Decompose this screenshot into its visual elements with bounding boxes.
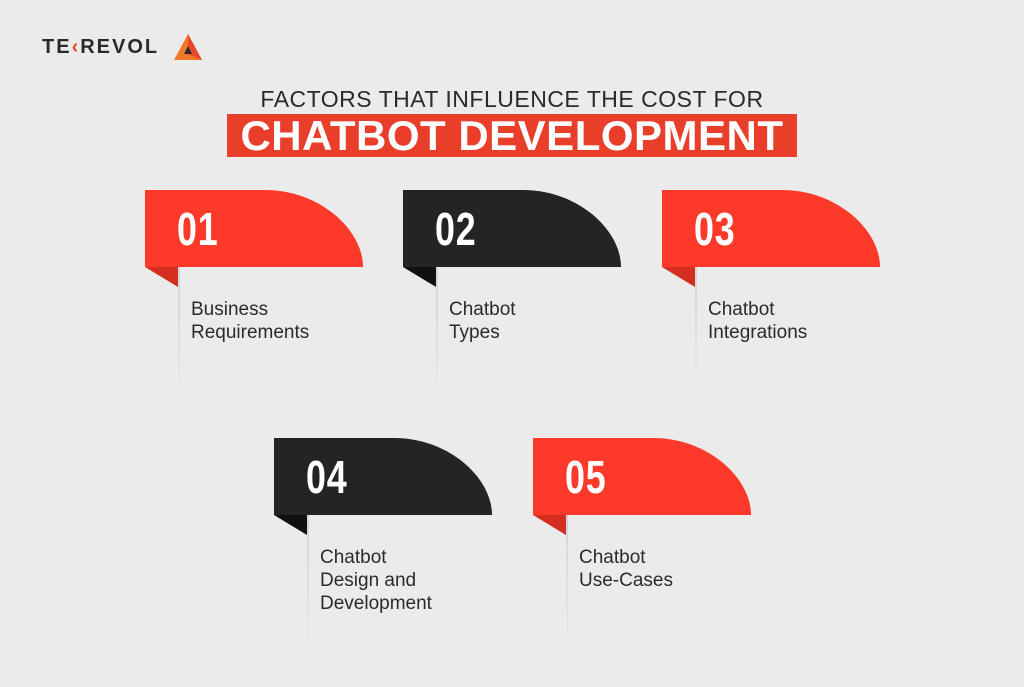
card 02: Types — [449, 322, 500, 343]
card 04: Development — [320, 593, 432, 614]
card 05: 05 — [565, 451, 606, 503]
card 01: 01 — [177, 203, 218, 255]
title: FACTORS THAT INFLUENCE THE COST FOR — [260, 86, 764, 112]
icon: logo triangle — [174, 34, 202, 60]
title — [227, 86, 797, 157]
card 01: Requirements — [191, 322, 309, 343]
card 03: 03 — [694, 203, 735, 255]
card 04: 04 — [306, 451, 347, 503]
card 02: Chatbot — [449, 299, 516, 320]
logo: TE‹REVOL — [42, 36, 159, 58]
card 01 — [145, 190, 363, 358]
card 04 — [274, 438, 492, 614]
card 03 — [662, 190, 880, 358]
card 01: Business — [191, 299, 268, 320]
card 04: Design and — [320, 570, 416, 591]
card 03: Integrations — [708, 322, 807, 343]
card 04: Chatbot — [320, 547, 387, 568]
card 02 — [403, 190, 621, 358]
card 05 — [533, 438, 751, 606]
card 03: Chatbot — [708, 299, 775, 320]
logo — [42, 34, 202, 60]
card 02: 02 — [435, 203, 476, 255]
card 05: Chatbot — [579, 547, 646, 568]
card 05: Use-Cases — [579, 570, 673, 591]
